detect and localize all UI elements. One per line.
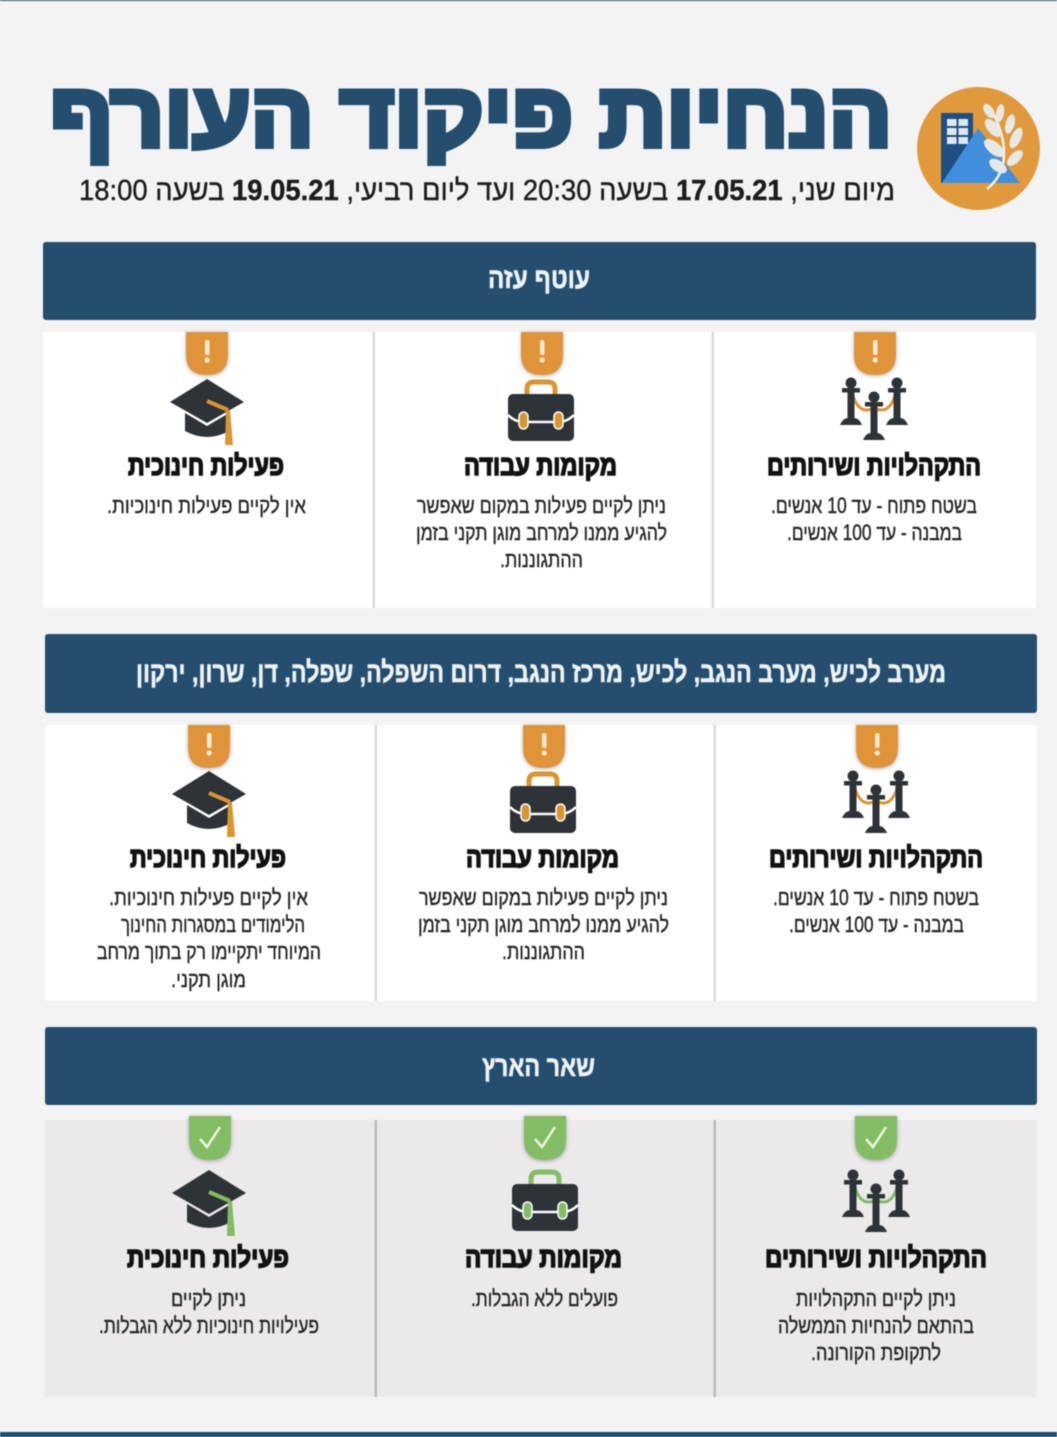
icon: graduation cap (172, 771, 246, 837)
icon: rope stanchions (842, 1170, 910, 1232)
badge: warning (854, 332, 896, 375)
heading: education: פעילות חינוכית (130, 842, 286, 873)
section 2: central regions (45, 634, 1037, 1001)
heading: workplaces: מקומות עבודה (466, 842, 619, 873)
panel: gatherings, section 1 (767, 332, 981, 545)
heading: workplaces: מקומות עבודה (464, 450, 617, 481)
section 3 heading bar (45, 1027, 1037, 1105)
text: gatherings rule: לתקופת הקורונה. (811, 1340, 941, 1365)
badge: warning (186, 332, 228, 375)
section 3: rest of the country (45, 1027, 1037, 1397)
text: workplaces rule: פועלים ללא הגבלות. (471, 1286, 618, 1311)
text: education rule: אין לקיים פעילות חינוכיות. (109, 885, 308, 910)
heading: education: פעילות חינוכית (127, 1242, 289, 1273)
panel: workplaces, section 3 (465, 1116, 622, 1311)
text: gatherings rule: בשטח פתוח - עד 10 אנשים. (771, 493, 977, 518)
text: workplaces rule: ההתגוננות. (500, 547, 583, 572)
icon: graduation cap (170, 379, 244, 445)
title: הנחיות פיקוד העורף (50, 66, 892, 166)
panel: education, section 3 (99, 1116, 319, 1338)
subtitle: dates: מיום שני, 17.05.21 בשעה 20:30 ועד ליום רביעי, 19.05.21 בשעה 18:00 (79, 175, 895, 207)
icon: rope stanchions (842, 770, 910, 833)
section 1 heading bar: עוטף עזה (488, 263, 590, 295)
heading: gatherings: התקהלויות ושירותים (769, 842, 983, 873)
heading: education: פעילות חינוכית (128, 450, 284, 481)
icon: rope stanchions (840, 378, 908, 440)
panel: gatherings, section 3 (765, 1116, 987, 1365)
text: education rule: פעילויות חינוכיות ללא הגבלות. (99, 1313, 319, 1338)
icon: briefcase (508, 382, 574, 441)
badge: warning (523, 725, 565, 768)
text: workplaces rule: להגיע ממנו למרחב מוגן תקני בזמן (418, 912, 669, 937)
text: education rule (99, 1286, 319, 1338)
text: gatherings rule (778, 1286, 974, 1365)
text: gatherings rule: בהתאם להנחיות הממשלה (778, 1313, 974, 1338)
panel: education, section 2 (97, 725, 321, 992)
text: education rule: ניתן לקיים (171, 1286, 246, 1311)
icon: graduation cap (172, 1170, 246, 1236)
section 2 heading bar (45, 634, 1037, 713)
bottom band (0, 1432, 1057, 1437)
text: workplaces rule: ניתן לקיים פעילות במקום שאפשר (419, 885, 668, 910)
badge: check mark (524, 1116, 566, 1160)
top edge line (0, 0, 1057, 1)
heading: workplaces: מקומות עבודה (465, 1242, 622, 1273)
text: gatherings rule: במבנה - עד 100 אנשים. (789, 912, 964, 937)
section 1: Gaza envelope (43, 242, 1036, 608)
text: education rule: אין לקיים פעילות חינוכיות. (107, 493, 306, 518)
panel: workplaces, section 1 (416, 332, 667, 572)
text: education rule: הלימודים במסגרות החינוך (121, 912, 305, 937)
text: gatherings rule: במבנה - עד 100 אנשים. (787, 520, 962, 545)
panel: gatherings, section 2 (769, 725, 983, 937)
heading: gatherings: התקהלויות ושירותים (765, 1242, 987, 1273)
panel: section 2 cards background (45, 725, 1037, 1001)
section 3 heading bar: שאר הארץ (482, 1051, 595, 1083)
icon: home front command logo (917, 87, 1040, 210)
badge: check mark (855, 1116, 897, 1160)
panel: section 3 cards background (45, 1120, 1037, 1397)
icon: briefcase (510, 774, 576, 833)
text: education rule: המיוחד יתקיימו רק בתוך מרחב (97, 939, 321, 964)
panel: section 1 cards background (43, 332, 1036, 608)
badge: check mark (189, 1116, 231, 1160)
text: education rule (97, 885, 321, 992)
icon: briefcase (512, 1172, 578, 1231)
text: gatherings rule (771, 493, 977, 545)
text: workplaces rule (416, 493, 667, 572)
badge: warning (856, 725, 898, 768)
text: gatherings rule: בשטח פתוח - עד 10 אנשים. (773, 885, 979, 910)
text: gatherings rule: ניתן לקיים התקהלויות (796, 1286, 956, 1311)
badge: warning (521, 332, 563, 375)
text: workplaces rule: להגיע ממנו למרחב מוגן תקני בזמן (416, 520, 667, 545)
panel: workplaces, section 2 (418, 725, 669, 964)
text: education rule: מוגן תקני. (171, 967, 246, 992)
text: gatherings rule (773, 885, 979, 937)
section 1 heading bar (43, 242, 1036, 320)
badge: warning (188, 725, 230, 768)
text: workplaces rule: ההתגוננות. (502, 939, 585, 964)
text: workplaces rule: ניתן לקיים פעילות במקום שאפשר (417, 493, 666, 518)
panel: education, section 1 (107, 332, 306, 518)
heading: gatherings: התקהלויות ושירותים (767, 450, 981, 481)
text: workplaces rule (418, 885, 669, 964)
